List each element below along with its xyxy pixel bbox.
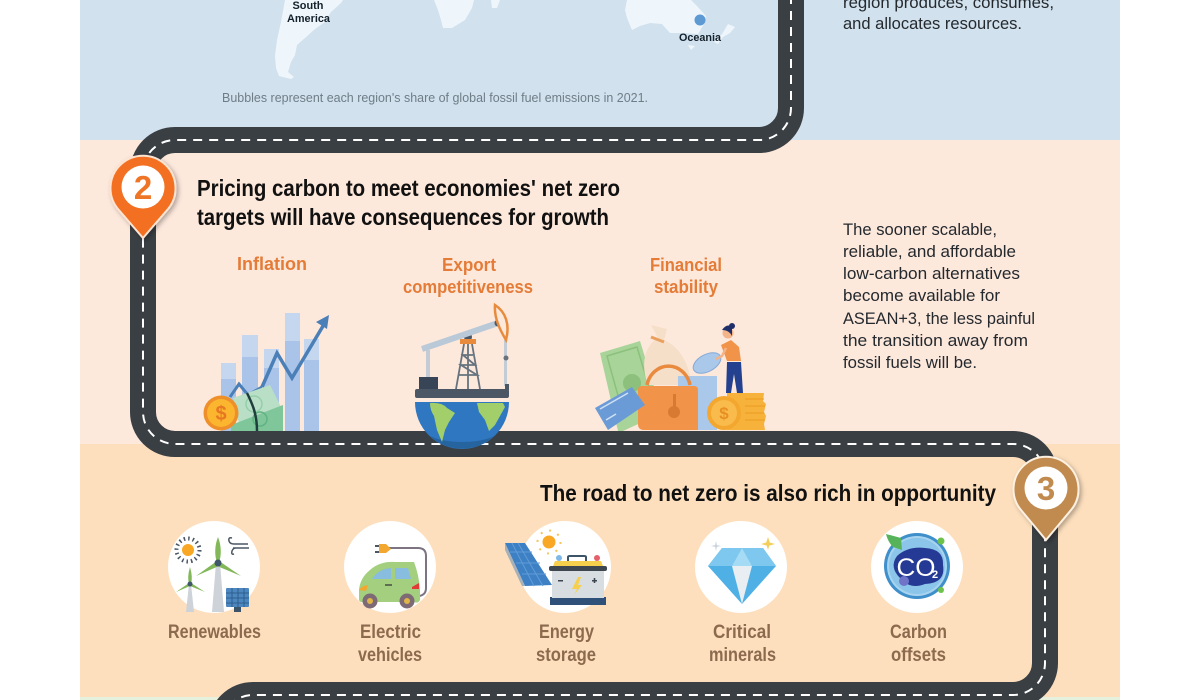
label: South America: South xyxy=(292,0,324,12)
label: Energy storage xyxy=(536,622,596,666)
label: South America: America xyxy=(287,13,331,25)
icon: critical minerals xyxy=(695,521,787,613)
heading: pricing carbon: targets will have consequences for growth xyxy=(197,204,609,230)
pin 2 xyxy=(111,156,176,238)
bubble: Oceania xyxy=(694,14,706,26)
pin 3 xyxy=(1013,457,1078,540)
panel: fossil fuel emissions map xyxy=(80,0,1120,140)
road xyxy=(143,0,1045,700)
label: Electric vehicles: Electric xyxy=(360,622,421,643)
label: South America xyxy=(287,0,331,25)
text: region allocation xyxy=(843,0,1054,33)
panel: next section xyxy=(80,697,1120,700)
label: Critical minerals xyxy=(709,622,776,666)
text: low-carbon alternatives: fossil fuels will be. xyxy=(843,354,977,372)
label: Export competitiveness: Export xyxy=(442,254,496,275)
label: Critical minerals: minerals xyxy=(709,645,776,666)
pin 3: 3 xyxy=(1037,470,1055,507)
heading: pricing carbon xyxy=(197,175,620,230)
label: Critical minerals: Critical xyxy=(713,622,771,643)
label: Oceania: Oceania xyxy=(679,32,722,44)
label: Energy storage: Energy xyxy=(539,622,594,643)
icon: carbon offsets: CO xyxy=(896,554,936,582)
label: Electric vehicles: vehicles xyxy=(358,645,422,666)
icon: inflation chart: $ xyxy=(215,403,227,425)
label: Electric vehicles xyxy=(358,622,422,666)
label: Financial stability: stability xyxy=(654,276,719,297)
panel: pricing carbon xyxy=(80,140,1120,444)
world map fragment xyxy=(275,0,735,79)
text: region allocation: and allocates resources. xyxy=(843,15,1022,33)
heading: pricing carbon: Pricing carbon to meet economies' net zero xyxy=(197,175,620,201)
icon: financial stability xyxy=(595,323,766,431)
icon: electric vehicle xyxy=(344,521,436,613)
text: low-carbon alternatives: low-carbon alternatives xyxy=(843,265,1020,283)
text: low-carbon alternatives xyxy=(843,221,1035,372)
heading: opportunity: The road to net zero is also rich in opportunity xyxy=(540,480,996,506)
label: Financial stability xyxy=(650,254,722,297)
icon: carbon offsets xyxy=(871,521,963,613)
label: Financial stability: Financial xyxy=(650,254,722,275)
icon: financial stability: $ xyxy=(719,404,729,423)
text: low-carbon alternatives: The sooner scalable, xyxy=(843,221,997,239)
text: low-carbon alternatives: the transition away from xyxy=(843,332,1028,350)
pin 2: 2 xyxy=(134,169,152,206)
label: Renewables: Renewables xyxy=(168,622,261,643)
icon: renewables xyxy=(168,521,260,613)
text: low-carbon alternatives: reliable, and affordable xyxy=(843,243,1016,261)
label: Carbon offsets: Carbon xyxy=(890,622,947,643)
map caption: Bubbles represent each region's share of global fossil fuel emissions in 2021. xyxy=(222,91,648,105)
icon: oil rig on globe xyxy=(415,305,509,449)
icon: carbon offsets: 2 xyxy=(932,569,938,581)
label: Carbon offsets: offsets xyxy=(891,645,946,666)
label: Inflation: Inflation xyxy=(237,253,307,274)
label: Carbon offsets xyxy=(890,622,947,666)
text: low-carbon alternatives: ASEAN+3, the less painful xyxy=(843,310,1035,328)
label: Export competitiveness xyxy=(403,254,533,297)
label: Energy storage: storage xyxy=(536,645,596,666)
icon: energy storage xyxy=(505,521,611,613)
text: low-carbon alternatives: become available for xyxy=(843,287,1001,305)
label: Export competitiveness: competitiveness xyxy=(403,276,533,297)
panel: opportunity xyxy=(80,444,1120,697)
icon: inflation chart xyxy=(204,313,329,431)
